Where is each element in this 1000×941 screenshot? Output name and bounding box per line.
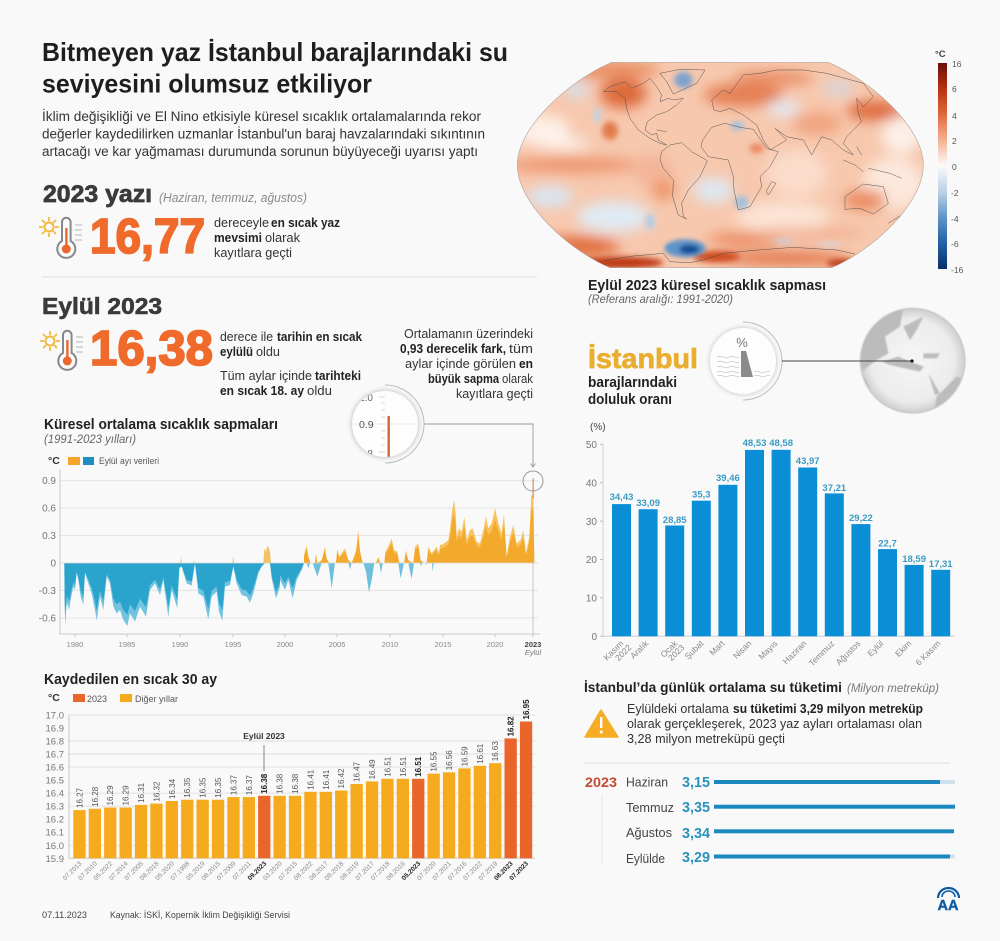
chart: global anomaly bars: 2000 bbox=[277, 640, 293, 649]
icon: dam bbox=[710, 322, 782, 400]
chart: hottest 30 months bars: 05.2023 bbox=[401, 860, 422, 882]
map caption: Eylül 2023 küresel sıcaklık sapması bbox=[588, 277, 826, 294]
heading: global anomalies chart bbox=[44, 416, 278, 446]
chart: hottest 30 months bars: 16.5 bbox=[46, 776, 64, 787]
chart: hottest 30 months bars: 16.49 bbox=[368, 759, 377, 779]
chart: hottest 30 months bars: 16.3 bbox=[46, 802, 64, 813]
callout: zoom lens on 0.9: 0.9 bbox=[359, 419, 374, 431]
chart: dam occupancy: Haziran bbox=[781, 638, 809, 666]
value: 16,77: 16,77 bbox=[90, 210, 205, 264]
title bbox=[42, 37, 508, 98]
footer: date and source: 07.11.2023 bbox=[42, 910, 87, 920]
text: 16,38 note: oldu bbox=[307, 384, 332, 398]
chart: dam occupancy: 2023 bbox=[666, 642, 687, 663]
callout: 0,93 difference: tüm bbox=[509, 342, 533, 356]
callout: zoom lens on 0.9: 0.8 bbox=[359, 449, 373, 460]
chart: global anomaly bars: 1995 bbox=[225, 640, 241, 649]
chart: hottest 30 months bars: 16.35 bbox=[183, 777, 192, 798]
color scale legend: -4 bbox=[951, 214, 959, 224]
text: 16,77 note: dereceyle bbox=[214, 216, 269, 230]
map caption: (Referans aralığı: 1991-2020) bbox=[588, 294, 733, 306]
chart: dam occupancy: Mayıs bbox=[756, 638, 779, 661]
chart: global anomaly bars: -0.6 bbox=[39, 614, 56, 624]
chart: monthly consumption rows bbox=[585, 774, 955, 866]
chart: dam occupancy: 6 Kasım bbox=[913, 638, 942, 667]
value: 16,38: 16,38 bbox=[90, 322, 213, 376]
chart: hottest 30 months bars: 16.61 bbox=[476, 743, 485, 764]
text: 16,77 note bbox=[214, 216, 340, 260]
callout: 0,93 difference: büyük sapma bbox=[428, 372, 500, 386]
legend: September data: Eylül ayı verileri bbox=[99, 456, 159, 466]
chart: hottest 30 months bars: 16.59 bbox=[460, 746, 469, 766]
chart: dam occupancy: Temmuz bbox=[807, 638, 836, 668]
text: 16,38 note: oldu bbox=[256, 345, 280, 359]
heading: 2023 summer: 2023 yazı bbox=[43, 181, 152, 208]
chart: dam occupancy: Mart bbox=[707, 638, 727, 657]
chart: hottest 30 months bars: 16.38 bbox=[291, 773, 300, 794]
chart: dam occupancy: Kasım bbox=[601, 638, 625, 662]
legend: hottest months: °C bbox=[48, 692, 60, 704]
chart: hottest 30 months bars: 08.2018 bbox=[324, 860, 345, 882]
chart: dam occupancy: (%) bbox=[590, 422, 606, 433]
callout: 0,93 difference: kayıtlara geçti bbox=[456, 387, 533, 401]
callout: 0,93 difference: Ortalamanın üzerindeki bbox=[404, 327, 533, 341]
chart: hottest 30 months bars: 07.2019 bbox=[478, 860, 499, 882]
intro text: artacağı ve kar yağmaması durumunda sorunun büyüyeceği uyarısı yaptı bbox=[42, 144, 478, 159]
logo: AA: AA bbox=[938, 897, 959, 914]
text: 16,77 note: mevsimi bbox=[214, 231, 262, 245]
heading: 2023 summer bbox=[43, 181, 307, 208]
text: 16,38 note: Tüm aylar içinde bbox=[220, 369, 312, 383]
chart: dam occupancy: 2022 bbox=[613, 642, 634, 663]
chart: dam occupancy: 48,58 bbox=[769, 438, 793, 449]
callout: 0,93 difference: olarak bbox=[502, 372, 534, 386]
chart: dam occupancy: Aralık bbox=[628, 638, 651, 661]
chart: monthly consumption rows: 2023 bbox=[585, 774, 617, 790]
intro text: İklim değişikliği ve El Nino etkisiyle küresel sıcaklık ortalamalarında rekor bbox=[42, 109, 481, 124]
chart: hottest 30 months bars: 16.29 bbox=[106, 785, 115, 806]
icon: warning bbox=[585, 710, 618, 737]
chart: dam occupancy: Şubat bbox=[683, 638, 706, 661]
chart: hottest 30 months bars: 16.56 bbox=[445, 750, 454, 770]
chart: hottest 30 months bars: 07.2009 bbox=[216, 860, 238, 882]
text: 16,38 note: derece ile bbox=[220, 330, 273, 344]
chart: global anomaly bars: 2023 bbox=[525, 640, 541, 649]
chart: global anomaly bars: -0.3 bbox=[39, 586, 56, 597]
chart: hottest 30 months bars: 16.41 bbox=[306, 769, 315, 790]
chart: hottest 30 months bars: 16.37 bbox=[229, 775, 238, 795]
chart: monthly consumption rows: Eylülde bbox=[626, 852, 665, 866]
chart: dam occupancy: 0 bbox=[591, 632, 597, 643]
heading: Istanbul dam occupancy: doluluk oranı bbox=[588, 392, 672, 408]
chart: global anomaly bars: 2005 bbox=[329, 640, 345, 649]
color scale legend: -16 bbox=[951, 265, 964, 275]
chart: hottest 30 months bars: 16.28 bbox=[91, 786, 100, 807]
chart: hottest 30 months bars: 07.2013 bbox=[62, 860, 84, 882]
text: 16,77 note: kayıtlara geçti bbox=[214, 246, 292, 260]
chart: dam occupancy: Ağustos bbox=[834, 638, 862, 667]
callout: 0,93 difference: aylar içinde görülen bbox=[405, 357, 516, 371]
chart: hottest 30 months bars: 16.42 bbox=[337, 768, 346, 788]
logo: AA bbox=[938, 888, 959, 914]
text: 16,38 note: en sıcak 18. ay bbox=[220, 384, 304, 398]
legend: September data: °C bbox=[48, 455, 60, 467]
color scale legend: 16 bbox=[952, 59, 962, 69]
chart: global anomaly bars: 0 bbox=[50, 558, 56, 570]
chart: global anomaly bars: 1990 bbox=[172, 640, 188, 649]
chart: hottest 30 months bars: 07.2005 bbox=[123, 860, 145, 882]
chart: dam occupancy: 22,7 bbox=[878, 538, 897, 550]
chart: hottest 30 months bars: 07.2022 bbox=[462, 860, 484, 882]
chart: hottest 30 months bars: 16.41 bbox=[322, 769, 331, 790]
text: consumption note: 3,28 milyon metreküpü geçti bbox=[627, 732, 785, 746]
chart: hottest 30 months bars: 17.0 bbox=[46, 710, 64, 722]
chart: monthly consumption rows: 3,34 bbox=[682, 825, 711, 842]
chart: dam occupancy: 39,46 bbox=[716, 473, 740, 484]
chart: hottest 30 months bars: 16.38 bbox=[276, 773, 285, 794]
chart: hottest 30 months bars: 16.35 bbox=[199, 777, 208, 798]
heading: September 2023: Eylül 2023 bbox=[42, 293, 162, 319]
chart: hottest 30 months bars: 08.2019 bbox=[339, 860, 361, 882]
title: seviyesini olumsuz etkiliyor bbox=[42, 68, 372, 98]
chart: hottest 30 months bars: 16.8 bbox=[46, 736, 64, 748]
chart: global anomaly bars: 2020 bbox=[487, 640, 503, 649]
chart: monthly consumption rows: Haziran bbox=[626, 776, 668, 790]
chart: hottest 30 months bars: 16.27 bbox=[75, 787, 84, 808]
text: 16,38 note: tarihin en sıcak bbox=[277, 330, 362, 344]
color scale legend: 4 bbox=[952, 111, 957, 121]
chart: hottest 30 months bars: 16.0 bbox=[46, 841, 64, 852]
chart: hottest 30 months bars: 16.31 bbox=[137, 782, 146, 803]
color scale legend: -6 bbox=[951, 239, 959, 249]
chart: hottest 30 months bars: 07.2021 bbox=[431, 860, 453, 882]
callout: 0,93 difference: en bbox=[519, 357, 533, 371]
chart: global anomaly bars: 0.6 bbox=[42, 504, 56, 514]
chart: hottest 30 months bars: 16.2 bbox=[46, 815, 64, 826]
chart: hottest 30 months bars: 16.6 bbox=[46, 762, 64, 774]
chart: global anomaly bars: 2015 bbox=[435, 640, 451, 649]
chart: hottest 30 months bars: 08.2017 bbox=[308, 860, 330, 882]
chart: monthly consumption rows: 3,35 bbox=[682, 799, 710, 816]
heading: Istanbul dam occupancy: barajlarındaki bbox=[588, 375, 677, 391]
text: 16,38 note: eylülü bbox=[220, 345, 253, 359]
chart: hottest 30 months bars bbox=[46, 699, 535, 882]
callout: 0,93 difference bbox=[400, 327, 534, 401]
heading: 2023 summer: (Haziran, temmuz, ağustos) bbox=[159, 191, 307, 205]
legend: hottest months bbox=[48, 692, 178, 705]
chart: hottest 30 months bars: 05.2020 bbox=[154, 860, 176, 882]
chart: hottest 30 months bars: 07.2011 bbox=[232, 860, 253, 882]
chart: hottest 30 months bars: 16.47 bbox=[353, 761, 362, 782]
chart: hottest 30 months bars: 08.2022 bbox=[293, 860, 315, 882]
chart: hottest 30 months bars: 16.95 bbox=[522, 699, 531, 720]
color scale legend: 2 bbox=[952, 136, 957, 146]
annotation: September 2023 bar: Eylül 2023 bbox=[243, 731, 285, 741]
chart: hottest 30 months bars: 07.1998 bbox=[170, 860, 191, 882]
icon: globe with Istanbul marker bbox=[782, 307, 967, 417]
icon: sun and thermometer 1 bbox=[39, 217, 82, 258]
chart: hottest 30 months bars: 08.2015 bbox=[200, 860, 222, 882]
chart: hottest 30 months bars: 16.51 bbox=[414, 756, 423, 777]
text: 16,77 note: olarak bbox=[265, 231, 301, 245]
text: consumption note: Eylüldeki ortalama bbox=[627, 702, 729, 716]
chart: hottest 30 months bars: 07.2014 bbox=[108, 860, 130, 882]
chart: hottest 30 months bars: 03.2020 bbox=[262, 860, 284, 882]
chart: global anomaly bars bbox=[39, 470, 541, 657]
chart: dam occupancy: 30 bbox=[586, 517, 597, 528]
chart: hottest 30 months bars: 16.29 bbox=[122, 785, 131, 806]
color scale legend: 0 bbox=[952, 162, 957, 172]
chart: dam occupancy bbox=[586, 422, 955, 668]
color scale legend bbox=[935, 49, 964, 275]
chart: dam occupancy: 10 bbox=[586, 594, 597, 604]
chart: hottest 30 months bars: 08.2023 bbox=[493, 860, 515, 882]
heading: Istanbul dam occupancy: İstanbul bbox=[588, 343, 698, 374]
icon: dam: % bbox=[736, 335, 748, 350]
chart: hottest 30 months bars: 07.2016 bbox=[447, 860, 469, 882]
text: consumption note bbox=[627, 702, 923, 746]
chart: hottest 30 months bars: 05.2022 bbox=[93, 860, 114, 882]
title: Bitmeyen yaz İstanbul barajlarındaki su bbox=[42, 37, 508, 67]
icon: sun and thermometer 2 bbox=[40, 331, 83, 370]
footer: date and source: Kaynak: İSKİ, Kopernik İklim Değişikliği Servisi bbox=[110, 910, 290, 920]
heading: water consumption: İstanbul’da günlük ortalama su tüketimi bbox=[584, 679, 842, 695]
chart: hottest 30 months bars: 07.2018 bbox=[370, 860, 392, 882]
callout: 0,93 difference: 0,93 derecelik fark, bbox=[400, 342, 506, 356]
chart: hottest 30 months bars: 15.9 bbox=[46, 854, 64, 865]
text: 16,77 note: en sıcak yaz bbox=[271, 216, 340, 230]
callout: zoom lens on 0.9 bbox=[351, 385, 543, 491]
color scale legend: 6 bbox=[952, 84, 957, 94]
intro text bbox=[42, 109, 485, 159]
heading: global anomalies chart: Küresel ortalama sıcaklık sapmaları bbox=[44, 416, 278, 433]
chart: hottest 30 months bars: 16.38 bbox=[260, 773, 269, 794]
chart: hottest 30 months bars: 16.55 bbox=[430, 751, 439, 772]
chart: dam occupancy: 17,31 bbox=[929, 559, 953, 570]
chart: dam occupancy: 48,53 bbox=[743, 438, 766, 449]
chart: hottest 30 months bars: 07.2017 bbox=[354, 860, 376, 882]
heading: global anomalies chart: (1991-2023 yılları) bbox=[44, 434, 136, 446]
heading: water consumption: (Milyon metreküp) bbox=[847, 683, 939, 695]
chart: dam occupancy: Nisan bbox=[731, 638, 754, 661]
map: global temperature anomaly bbox=[507, 57, 930, 273]
chart: hottest 30 months bars: 16.51 bbox=[383, 756, 392, 777]
chart: dam occupancy: 29,22 bbox=[849, 513, 873, 524]
chart: monthly consumption rows: 3,15 bbox=[682, 774, 710, 791]
chart: monthly consumption rows: Temmuz bbox=[626, 801, 674, 815]
chart: dam occupancy: 18,59 bbox=[902, 554, 926, 565]
chart: hottest 30 months bars: 07.2023 bbox=[508, 860, 530, 882]
chart: global anomaly bars: 0.9 bbox=[42, 476, 56, 487]
color scale legend: -2 bbox=[951, 188, 959, 198]
text: consumption note: olarak gerçekleşerek, 2023 yaz ayları ortalaması olan bbox=[627, 717, 922, 731]
chart: global anomaly bars: Eylül bbox=[525, 648, 541, 657]
chart: hottest 30 months bars: 07.2015 bbox=[277, 860, 299, 882]
chart: dam occupancy: 35,3 bbox=[692, 490, 711, 500]
chart: hottest 30 months bars: 16.35 bbox=[214, 777, 223, 798]
color scale legend: °C bbox=[935, 49, 946, 60]
chart: hottest 30 months bars: 08.2016 bbox=[385, 860, 407, 882]
chart: hottest 30 months bars: 09.2023 bbox=[247, 860, 268, 882]
annotation: September 2023 bar bbox=[243, 731, 285, 771]
chart: hottest 30 months bars: 16.32 bbox=[152, 781, 161, 802]
intro text: değerler kaydedilirken uzmanlar İstanbul'un baraj havzalarındaki sıkıntının bbox=[42, 126, 485, 142]
map caption bbox=[588, 277, 826, 306]
text: 16,38 note bbox=[220, 330, 362, 398]
text: consumption note: su tüketimi 3,29 milyon metreküp bbox=[733, 702, 923, 716]
chart: dam occupancy: 40 bbox=[586, 478, 597, 490]
chart: hottest 30 months bars: 07.2010 bbox=[77, 860, 99, 882]
chart: hottest 30 months bars: 16.9 bbox=[46, 724, 64, 734]
legend: hottest months: Diğer yıllar bbox=[135, 694, 178, 705]
callout: zoom lens on 0.9: 1.0 bbox=[359, 393, 373, 404]
chart: dam occupancy: Eylül bbox=[865, 638, 885, 658]
legend: September data bbox=[48, 455, 159, 467]
chart: dam occupancy: Ocak bbox=[658, 638, 680, 659]
chart: global anomaly bars: 0.3 bbox=[42, 531, 56, 542]
chart: hottest 30 months bars: 16.63 bbox=[491, 741, 500, 761]
chart: dam occupancy: 34,43 bbox=[610, 492, 633, 503]
chart: hottest 30 months bars: 05.2019 bbox=[185, 860, 207, 882]
chart: hottest 30 months bars: 16.82 bbox=[507, 716, 516, 736]
chart: global anomaly bars: 1985 bbox=[119, 640, 135, 649]
chart: dam occupancy: 37,21 bbox=[822, 483, 847, 494]
chart: hottest 30 months bars: 16.1 bbox=[46, 828, 64, 839]
chart: hottest 30 months bars: 16.4 bbox=[46, 789, 64, 800]
chart: global anomaly bars: 2010 bbox=[382, 640, 398, 649]
chart: hottest 30 months bars: 16.51 bbox=[399, 756, 408, 777]
legend: hottest months: 2023 bbox=[87, 694, 107, 705]
chart: hottest 30 months bars: 16.34 bbox=[168, 778, 177, 799]
chart: dam occupancy: 50 bbox=[586, 440, 597, 451]
heading: Istanbul dam occupancy bbox=[588, 343, 698, 408]
chart: global anomaly bars: 1980 bbox=[67, 640, 83, 649]
chart: hottest 30 months bars: 16.37 bbox=[245, 775, 254, 795]
text: 16,38 note: tarihteki bbox=[315, 369, 361, 383]
chart: dam occupancy: 33,09 bbox=[636, 498, 660, 509]
chart: hottest 30 months bars: 16.7 bbox=[46, 750, 64, 760]
chart: hottest 30 months bars: 07.2020 bbox=[416, 860, 438, 882]
chart: dam occupancy: Ekim bbox=[893, 638, 913, 659]
chart: dam occupancy: 28,85 bbox=[663, 515, 687, 526]
heading: hottest 30 months: Kaydedilen en sıcak 30 ay bbox=[44, 671, 218, 688]
chart: monthly consumption rows: 3,29 bbox=[682, 849, 710, 866]
chart: dam occupancy: 43,97 bbox=[796, 456, 820, 467]
chart: hottest 30 months bars: 08.2018 bbox=[139, 860, 161, 882]
chart: dam occupancy: 20 bbox=[586, 555, 597, 566]
chart: monthly consumption rows: Ağustos bbox=[626, 826, 672, 840]
